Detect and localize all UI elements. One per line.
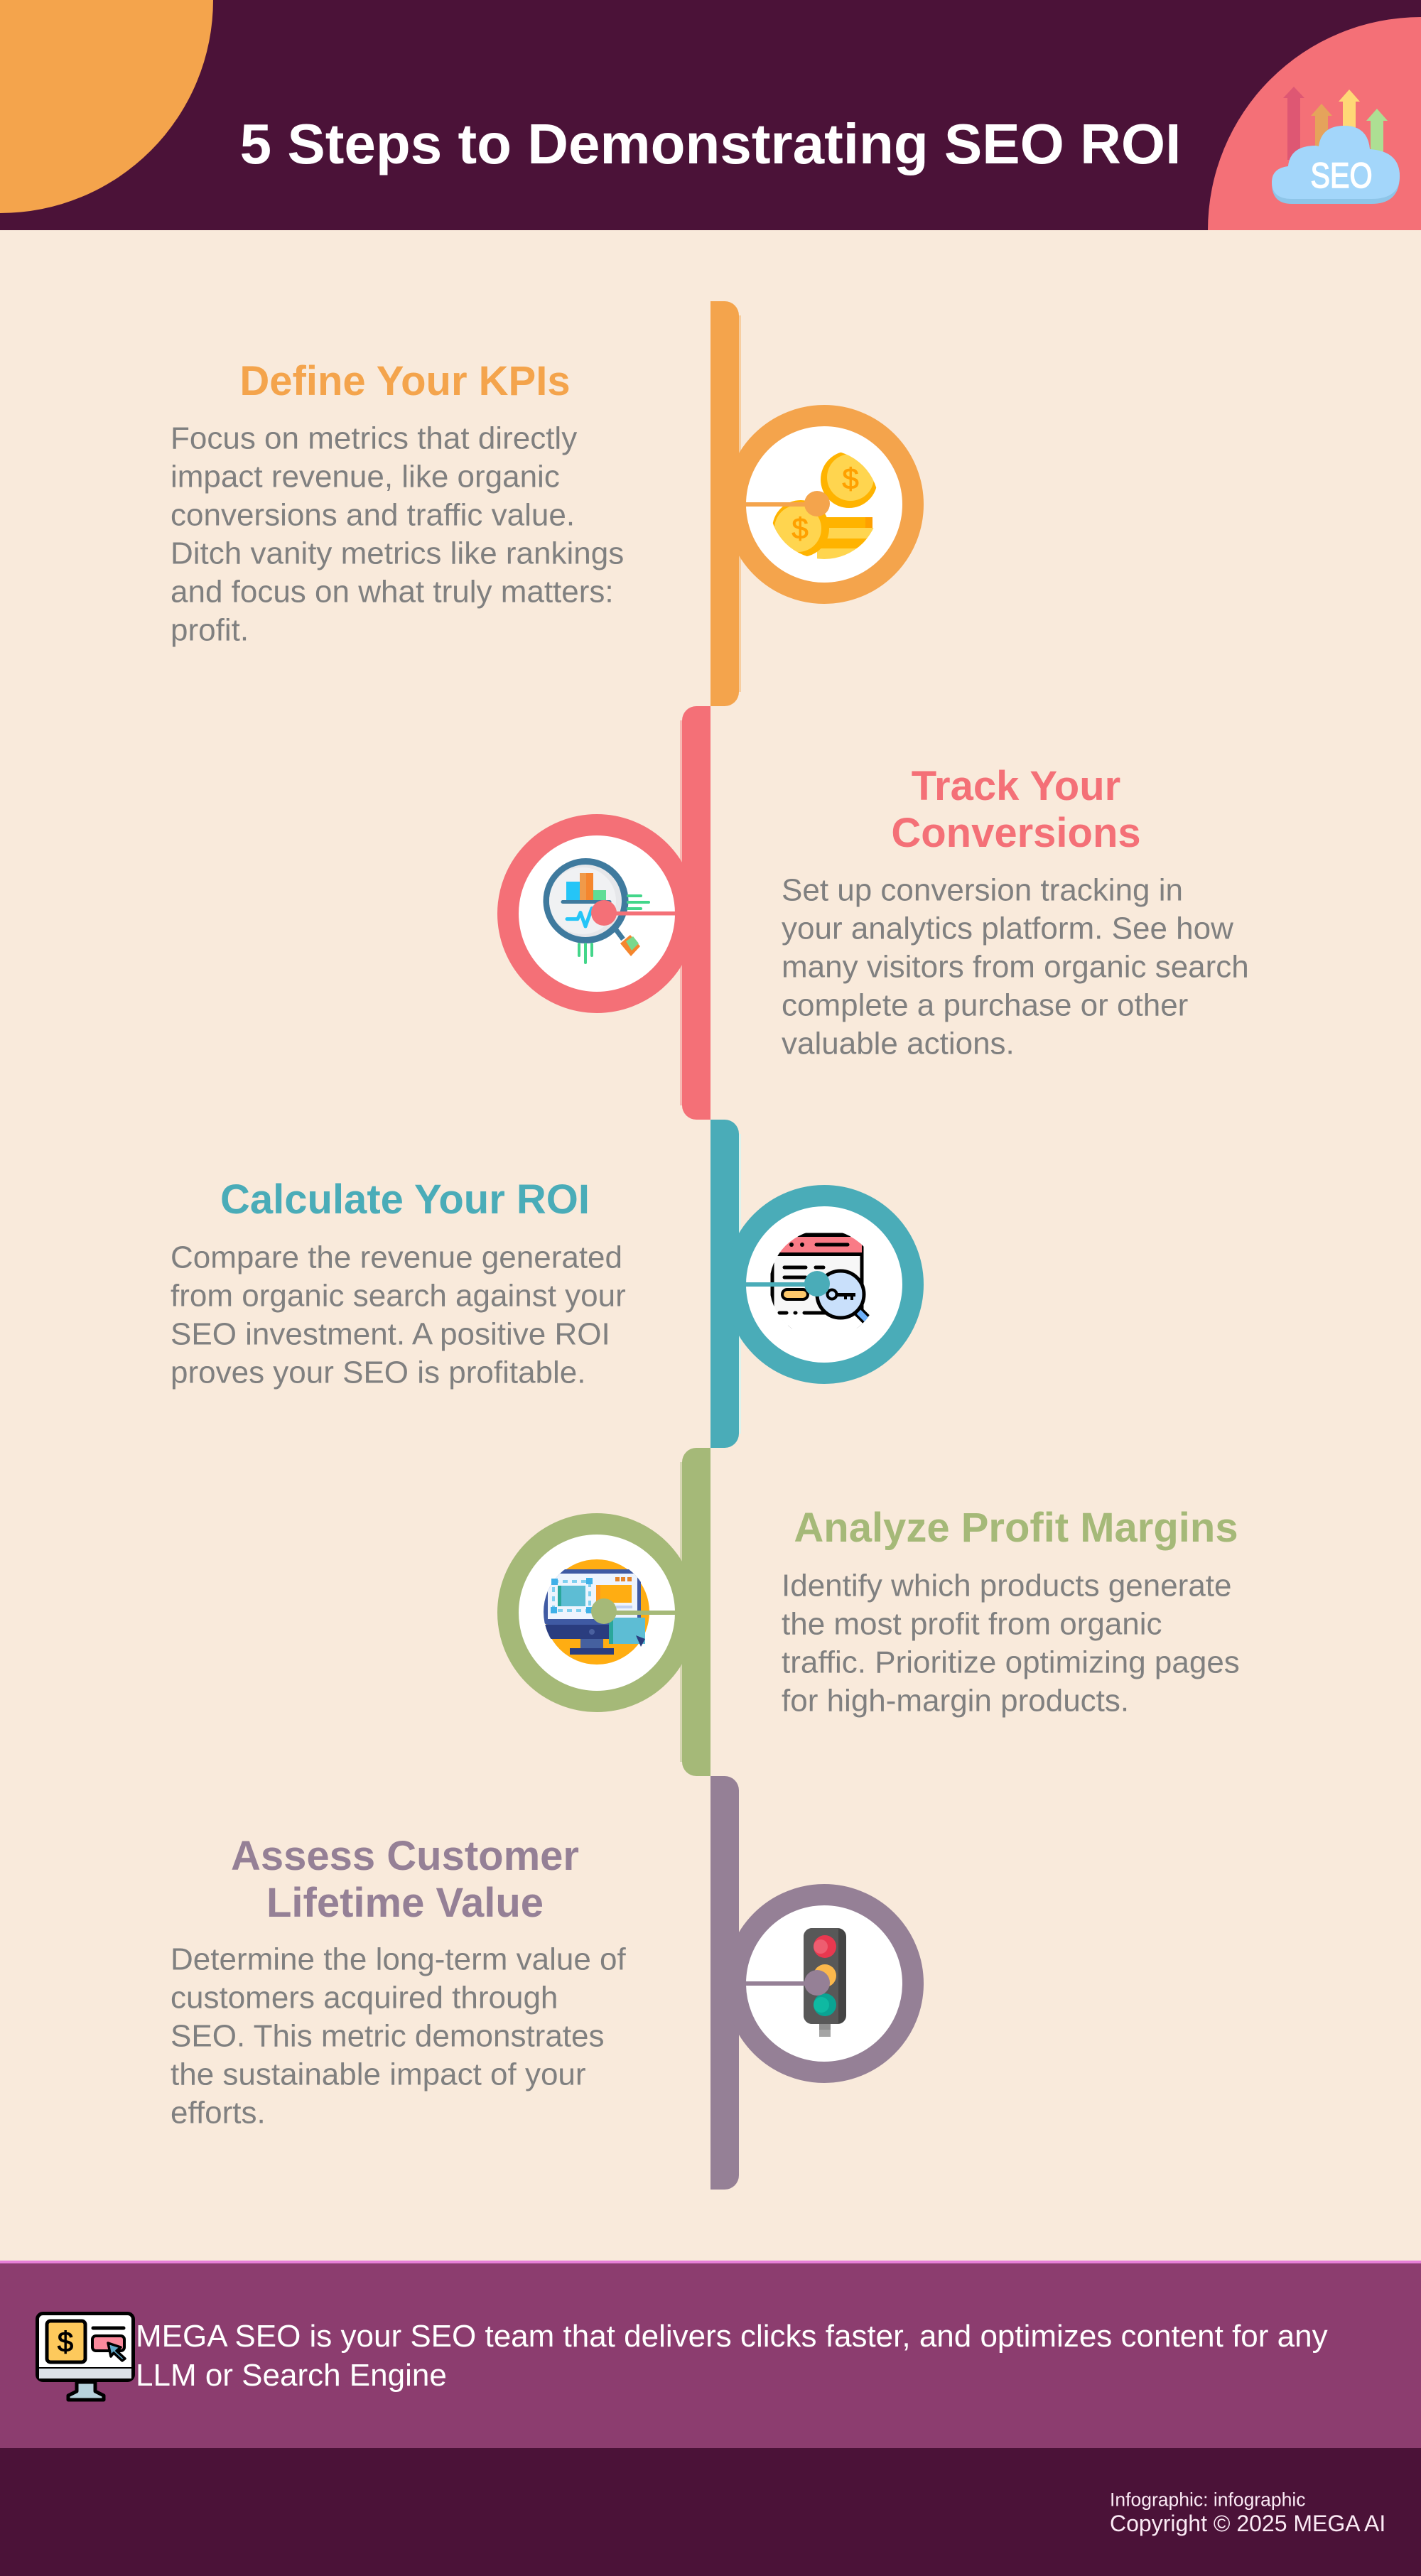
icon: coins: $ [791,512,809,545]
text block: for high-margin products. [782,1684,1129,1718]
panel: step 2 track conversions [508,706,1249,1120]
text block [171,1942,627,2130]
ring [508,1524,686,1701]
bar [710,301,739,706]
panel: step 1 define KPIs [171,301,913,706]
text block [171,1240,626,1390]
connector [746,1271,830,1297]
ring [508,825,686,1002]
ring [735,416,913,593]
decorative orange quarter circle [0,0,213,213]
connector [591,1598,675,1624]
text block: and focus on what truly matters: [171,574,614,610]
text block: conversions and traffic value. [171,497,575,533]
heading: Analyze Profit Margins [794,1505,1238,1551]
icon: traffic light [804,1928,846,2037]
panel: step 5 customer lifetime value [171,1776,913,2190]
connector [591,900,675,926]
icon: browser with key magnifier [770,1233,870,1328]
text block: Ditch vanity metrics like rankings [171,536,624,571]
copyright text: Copyright © 2025 MEGA AI [1110,2511,1385,2536]
heading [891,763,1141,856]
text block: impact revenue, like organic [171,459,560,494]
text block: from organic search against your [171,1279,626,1313]
text block: SEO. This metric demonstrates [171,2019,604,2053]
text block: customers acquired through [171,1981,558,2015]
text block: proves your SEO is profitable. [171,1355,585,1390]
text block: Set up conversion tracking in [782,872,1183,908]
text block: Compare the revenue generated [171,1240,622,1275]
text block: SEO investment. A positive ROI [171,1317,610,1351]
text block: complete a purchase or other [782,987,1188,1023]
text block: profit. [171,612,249,648]
panel: header [0,0,1421,230]
icon: coins: $ [842,462,859,495]
icon: SEO cloud with arrows: SEO [1310,156,1373,195]
heading: Conversions [891,810,1141,856]
icon: monitor with dollar card [37,2313,134,2400]
panel: step 3 calculate ROI [171,1120,913,1448]
text block: Focus on metrics that directly [171,421,577,456]
icon: magnifier with chart [543,858,649,963]
text block: many visitors from organic search [782,949,1249,985]
bar [710,1120,739,1448]
bar [682,706,710,1120]
text block [782,1569,1240,1718]
icon: monitor with layout [544,1559,649,1665]
text block: efforts. [171,2096,266,2130]
ring [735,1196,913,1373]
panel: footer [0,2448,1421,2576]
heading [231,1833,579,1926]
panel: promo band [0,2261,1421,2448]
text block: your analytics platform. See how [782,911,1233,946]
decorative coral quarter circle [1208,17,1421,230]
panel: step 4 analyze profit margins [508,1448,1240,1776]
icon: monitor with dollar card: $ [58,2327,73,2358]
text block: valuable actions. [782,1026,1015,1061]
text block: Identify which products generate [782,1569,1232,1603]
heading: Lifetime Value [266,1880,544,1926]
heading: Define Your KPIs [239,358,571,404]
connector [746,1970,830,1996]
icon: coins [772,451,877,560]
bar [710,1776,739,2190]
text block: the most profit from organic [782,1607,1162,1641]
heading: Calculate Your ROI [220,1176,590,1223]
text block [782,872,1249,1061]
heading: Track Your [912,763,1120,809]
credit text: Infographic: infographic [1110,2489,1305,2511]
text block [171,421,624,648]
icon: SEO cloud with arrows [1272,87,1400,204]
promo text [136,2319,1328,2393]
promo text: LLM or Search Engine [136,2358,447,2393]
promo text: MEGA SEO is your SEO team that delivers clicks faster, and optimizes content for any [136,2319,1328,2354]
ring [735,1895,913,2072]
text block: traffic. Prioritize optimizing pages [782,1645,1240,1679]
text block: Determine the long-term value of [171,1942,627,1976]
connector [746,491,830,516]
title: 5 Steps to Demonstrating SEO ROI [240,112,1181,175]
heading: Assess Customer [231,1833,579,1879]
bar [682,1448,710,1776]
text block: the sustainable impact of your [171,2057,586,2091]
